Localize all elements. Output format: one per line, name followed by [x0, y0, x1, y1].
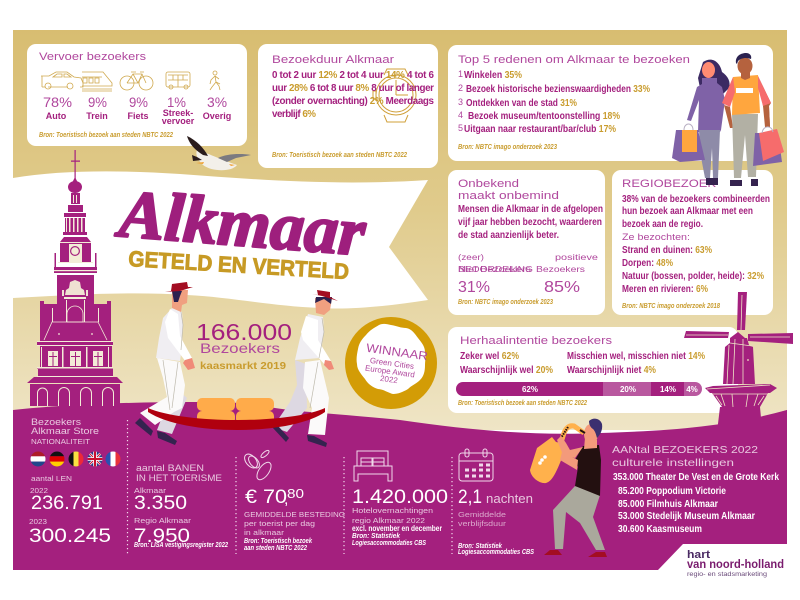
illustration: windmill — [684, 292, 793, 432]
text: intro — [458, 204, 603, 241]
stat: trein — [86, 94, 108, 121]
source — [244, 536, 313, 552]
text: verblijfsduur label: verblijfsduur — [458, 519, 507, 528]
shirt — [575, 445, 601, 496]
text: intro: vijf jaar hebben bezocht, waarderen — [458, 217, 602, 228]
text: regio intro: bezoek aan de regio. — [622, 219, 703, 230]
source: Bron: Statistiek — [458, 541, 503, 550]
panel: hotelovernachtingen — [352, 451, 448, 547]
heading — [612, 444, 758, 469]
stat: alkmaar — [134, 486, 187, 514]
list: reasons: 4 — [458, 110, 463, 120]
list: reasons: Uitgaan naar restaurant/bar/club 17% — [464, 124, 616, 135]
stats: beoordeling: BEOORDELING — [458, 264, 533, 274]
heading — [136, 463, 222, 483]
tower details — [37, 195, 114, 406]
icon: bed — [354, 451, 392, 481]
list: reasons: Winkelen 35% — [464, 70, 522, 81]
text: besteding label — [244, 510, 345, 537]
heading: AANtal BEZOEKERS 2022 — [612, 444, 758, 456]
stat: streekvervoer — [162, 94, 195, 126]
trousers — [553, 486, 605, 550]
red carrying sling — [148, 408, 325, 430]
stat: aantal LEN — [29, 474, 111, 547]
stacked bar chart: 62% — [522, 385, 538, 394]
stats: beoordeling: 85% — [544, 279, 580, 296]
list: reasons: Bezoek museum/tentoonstelling 18% — [468, 111, 620, 122]
stat: euro amount: , — [284, 491, 288, 508]
text: intro: Mensen die Alkmaar in de afgelopen — [458, 204, 603, 215]
stacked bar chart: 4% — [686, 385, 698, 394]
icon: train — [82, 72, 112, 91]
logo: hart van noord-holland — [658, 544, 800, 600]
stat: alkmaar: 3.350 — [134, 493, 187, 514]
source: Bron: Toeristisch bezoek aan steden NBTC 2022 — [272, 150, 408, 159]
saxophone — [530, 437, 566, 483]
stat: auto — [43, 94, 72, 121]
icon: watch — [373, 69, 416, 122]
source: Bron: NBTC imago onderzoek 2023 — [458, 297, 554, 306]
arms — [557, 436, 583, 458]
badge: winnaar: Europe Award — [364, 364, 415, 379]
stat: overig: 3% — [207, 94, 227, 110]
stat: nachten — [458, 487, 533, 508]
text: besteding label: GEMIDDELDE BESTEDING — [244, 510, 345, 519]
text: besteding label: per toerist per dag — [244, 519, 315, 528]
heading: top 5: Top 5 redenen om Alkmaar te bezoeken — [458, 54, 690, 66]
badge: winnaar: Green Cities — [369, 356, 415, 371]
stat: euro amount: € 70 — [245, 487, 287, 508]
icon: bicycle — [120, 72, 153, 90]
source: Bron: Statistiek — [352, 531, 401, 540]
illustration: church tower — [27, 150, 123, 406]
list: 53.000 Stedelijk Museum Alkmaar — [618, 511, 755, 522]
stat: aantal LEN: 236.791 — [31, 493, 103, 514]
heading: Alkmaar Store — [31, 426, 99, 436]
text: regio intro: 38% van de bezoekers combineerden — [622, 194, 770, 205]
icon: coins — [242, 449, 274, 482]
stat: euro amount: 80 — [287, 486, 304, 501]
legend — [460, 351, 705, 376]
text: hotel label: excl. november en december — [352, 524, 442, 533]
text: duration list — [272, 70, 435, 120]
text: regio intro — [622, 194, 770, 230]
panel: besteding — [242, 449, 345, 552]
subtitle: geteld en verteld: GETELD EN VERTELD — [128, 246, 350, 284]
dotted dividers — [128, 420, 452, 554]
stat: fiets: Fiets — [127, 111, 149, 121]
stat: regio alkmaar — [134, 516, 192, 547]
list: 30.600 Kaasmuseum — [618, 524, 702, 535]
stat: regio alkmaar: Regio Alkmaar — [134, 516, 192, 525]
purple footer area — [13, 402, 787, 570]
stats: beoordeling: Bezoekers — [536, 264, 585, 274]
stats: beoordeling: Niet Bezoekers — [458, 264, 531, 274]
stat: kaasmarkt visitors: kaasmarkt 2019 — [200, 360, 286, 372]
stat: aantal LEN: 2023 — [29, 519, 47, 526]
neck and head — [584, 438, 597, 449]
stat: fiets: 9% — [129, 94, 148, 110]
stat: kaasmarkt visitors — [196, 319, 292, 372]
hair — [589, 419, 602, 438]
heading — [31, 417, 99, 436]
text: duration list: uur 28% 6 tot 8 uur 8% 8 uur of langer — [272, 83, 434, 94]
shoes — [544, 550, 607, 557]
stacked bar chart: 14% — [660, 385, 676, 394]
panel: bezoekers alkmaar store — [29, 417, 122, 547]
source — [458, 541, 534, 556]
panel: verblijfsduur — [458, 449, 534, 556]
stat: aantal LEN: 2022 — [30, 488, 48, 495]
text: hotel label: Hotelovernachtingen — [352, 506, 433, 515]
text: verblijfsduur label: Gemiddelde — [458, 510, 506, 519]
list: regio: Meren en rivieren: 6% — [622, 284, 708, 295]
background — [13, 30, 787, 430]
stat: aantal LEN: 300.245 — [29, 526, 111, 547]
stat: overig — [203, 94, 231, 121]
text: hotel label: regio Alkmaar 2022 — [352, 516, 425, 525]
text: intro: de stad aanzienlijk beter. — [458, 230, 559, 241]
source: Bron: NBTC imago onderzoek 2023 — [458, 142, 558, 151]
stat: overig: Overig — [203, 111, 231, 121]
stat: nachten: nachten — [486, 491, 533, 506]
badge: winnaar: WINNAAR — [365, 341, 429, 363]
legend: Zeker wel 62% — [460, 351, 519, 362]
white banner flag — [13, 171, 428, 309]
panel: top 5 — [448, 45, 773, 161]
panel: onbekend maakt onbemind — [448, 170, 605, 315]
list: regio: Dorpen: 48% — [622, 258, 673, 269]
stat: trein: Trein — [86, 111, 108, 121]
stat: euro amount — [245, 486, 304, 508]
stats: beoordeling: positieve — [555, 252, 598, 262]
source: Bron: Toeristisch bezoek — [244, 536, 313, 545]
list: regio: Strand en duinen: 63% — [622, 245, 712, 256]
badge: winnaar: 2022 — [379, 374, 399, 385]
legend: Waarschijnlijk wel 20% — [460, 365, 553, 376]
stat: kaasmarkt visitors: Bezoekers — [200, 340, 280, 356]
source: Logiesaccommodaties CBS — [352, 538, 426, 547]
icon: car — [41, 72, 83, 89]
icon: walking person — [210, 71, 220, 90]
heading: vervoer: Vervoer bezoekers — [39, 51, 147, 63]
stat: alkmaar: Alkmaar — [134, 486, 167, 495]
heading: onbekend: maakt onbemind — [458, 190, 559, 202]
label: nationaliteit: NATIONALITEIT — [31, 439, 91, 446]
stat: kaasmarkt visitors: 166.000 — [196, 319, 292, 345]
text: duration list: verblijf 6% — [272, 109, 316, 120]
source: Bron: Toeristisch bezoek aan steden NBTC 2022 — [39, 130, 174, 139]
source: Bron: Toeristisch bezoek aan steden NBTC 2022 — [458, 398, 588, 407]
panel: banen in het toerisme — [134, 463, 229, 549]
heading: onbekend — [458, 178, 559, 202]
logo: hart van noord-holland: van noord-holland — [687, 559, 784, 571]
flags — [30, 451, 122, 467]
man — [722, 53, 771, 186]
illustration: seagull — [187, 136, 251, 170]
woman — [687, 60, 730, 185]
stat: auto: 78% — [43, 94, 72, 110]
heading: bezoekduur: Bezoekduur Alkmaar — [272, 54, 394, 66]
list: reasons — [458, 69, 650, 135]
stats: beoordeling: 31% — [458, 279, 490, 296]
list: reasons: 2 — [458, 83, 463, 93]
stacked bar chart — [456, 382, 702, 396]
badge: winnaar — [345, 317, 437, 409]
stat: streekvervoer: 1% — [167, 94, 186, 110]
right carrier — [272, 290, 338, 447]
legend: Misschien wel, misschien niet 14% — [567, 351, 705, 362]
list: reasons: 3 — [458, 97, 463, 107]
source — [352, 531, 426, 547]
text: hotel label — [352, 506, 442, 533]
source: aan steden NBTC 2022 — [244, 543, 308, 552]
heading: regiobezoek: REGIOBEZOEK — [622, 178, 717, 190]
right shopping bag — [753, 127, 784, 166]
source: Logiesaccommodaties CBS — [458, 547, 534, 556]
left carrier — [135, 282, 195, 445]
illustration: cheese carriers — [135, 282, 338, 447]
logo: hart van noord-holland: regio- en stadsmarketing — [687, 572, 767, 578]
stat: aantal LEN: aantal LEN — [31, 474, 72, 483]
panel: herhaalintentie — [448, 327, 738, 413]
list — [613, 472, 779, 535]
text: besteding label: in alkmaar — [244, 528, 285, 537]
subheading: Ze bezochten: — [622, 232, 690, 242]
icon: calendar — [459, 449, 493, 481]
list: regio: Natuur (bossen, polder, heide): 32% — [622, 271, 764, 282]
stat: streekvervoer: vervoer — [162, 116, 195, 126]
text: verblijfsduur label — [458, 510, 507, 528]
left shopping bag — [672, 124, 705, 162]
illustration: couple with shopping bags — [672, 53, 784, 186]
list: reasons: Bezoek historische bezienswaardigheden 33% — [466, 84, 650, 95]
stat: overnachtingen: 1.420.000 — [352, 487, 448, 508]
text: duration list: (zonder overnachting) 2% Meerdaags — [272, 96, 435, 107]
stat: streekvervoer: Streek- — [163, 108, 193, 118]
heading: culturele instellingen — [612, 457, 734, 469]
stat: trein: 9% — [88, 94, 107, 110]
cheese wheels — [197, 398, 274, 424]
list: reasons: 5 — [458, 123, 463, 133]
stat: fiets — [127, 94, 149, 121]
source: Bron: NBTC imago onderzoek 2018 — [622, 301, 721, 310]
panel: bezoekduur — [258, 44, 438, 168]
heading: Bezoekers — [31, 417, 82, 427]
text: regio intro: hun bezoek aan Alkmaar met een — [622, 206, 753, 217]
text: duration list: 0 tot 2 uur 12% 2 tot 4 uur 14% 4 tot 6 — [272, 70, 435, 81]
list: 85.200 Poppodium Victorie — [618, 486, 726, 497]
list: regio — [622, 245, 764, 295]
list: reasons: 1 — [458, 69, 463, 79]
list: reasons: Ontdekken van de stad 31% — [466, 98, 577, 109]
panel: regiobezoek — [612, 170, 773, 315]
stacked bar chart: 20% — [620, 385, 636, 394]
heading: herhaalintentie: Herhaalintentie bezoekers — [460, 335, 613, 347]
heading: onbekend: Onbekend — [458, 178, 519, 190]
title: Alkmaar: Alkmaar — [113, 175, 369, 270]
illustration: saxophone player — [530, 419, 607, 557]
icon: bus — [166, 72, 190, 89]
heading: IN HET TOERISME — [136, 473, 222, 483]
stats: beoordeling — [458, 252, 598, 296]
stat: regio alkmaar: 7.950 — [134, 526, 190, 547]
source: Bron: LISA vestigingsregister 2022 — [134, 540, 229, 549]
heading: aantal BANEN — [136, 463, 204, 473]
logo: hart van noord-holland: hart — [687, 549, 710, 561]
legend: Waarschijnlijk niet 4% — [567, 365, 656, 376]
list: 85.000 Filmhuis Alkmaar — [618, 499, 718, 510]
stat: auto: Auto — [46, 111, 67, 121]
panel: vervoer bezoekers — [27, 44, 247, 146]
stats: beoordeling: (zeer) — [458, 252, 484, 262]
stat: nachten: 2,1 — [458, 487, 482, 508]
panel: cultural institutions — [612, 444, 779, 535]
